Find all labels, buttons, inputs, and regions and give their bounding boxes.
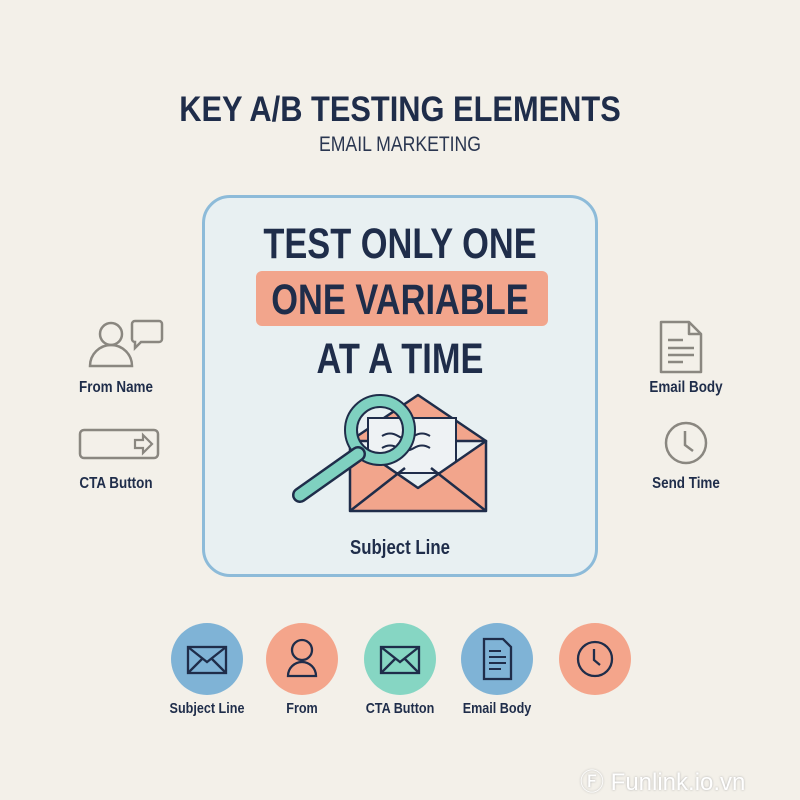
row: bottom icons: From: [286, 700, 318, 717]
circle: from: [266, 623, 338, 695]
circle: send time: [559, 623, 631, 695]
row: bottom icons: Email Body: [463, 700, 531, 717]
heading line 3: AT A TIME: [317, 335, 483, 383]
label: subject line: Subject Line: [350, 537, 450, 559]
panel: main message: [202, 195, 598, 577]
label: email body: Email Body: [649, 379, 723, 396]
row: bottom icons: CTA Button: [366, 700, 434, 717]
labels: Subject Line: [170, 700, 244, 717]
title: KEY A/B TESTING ELEMENTS: [179, 90, 621, 129]
highlight: one variable: [256, 271, 548, 326]
panel: main message: ONE VARIABLE: [271, 276, 529, 324]
icon: clock: [664, 422, 708, 464]
circle: cta button: [364, 623, 436, 695]
watermark: Ⓕ Funlink.io.vn: [580, 769, 745, 796]
label: cta button: CTA Button: [79, 475, 153, 492]
heading line 1: TEST ONLY ONE: [263, 220, 537, 268]
label: from name: From Name: [79, 379, 153, 396]
row: bottom icons: [170, 623, 631, 717]
icon: cta button: [78, 428, 160, 460]
icon: envelope with magnifier: [292, 394, 488, 512]
icon: from name: [88, 320, 164, 368]
icon: email body document: [660, 320, 702, 374]
circle: email body: [461, 623, 533, 695]
label: send time: Send Time: [652, 475, 720, 492]
circle: subject line: [171, 623, 243, 695]
subtitle: EMAIL MARKETING: [319, 133, 481, 156]
